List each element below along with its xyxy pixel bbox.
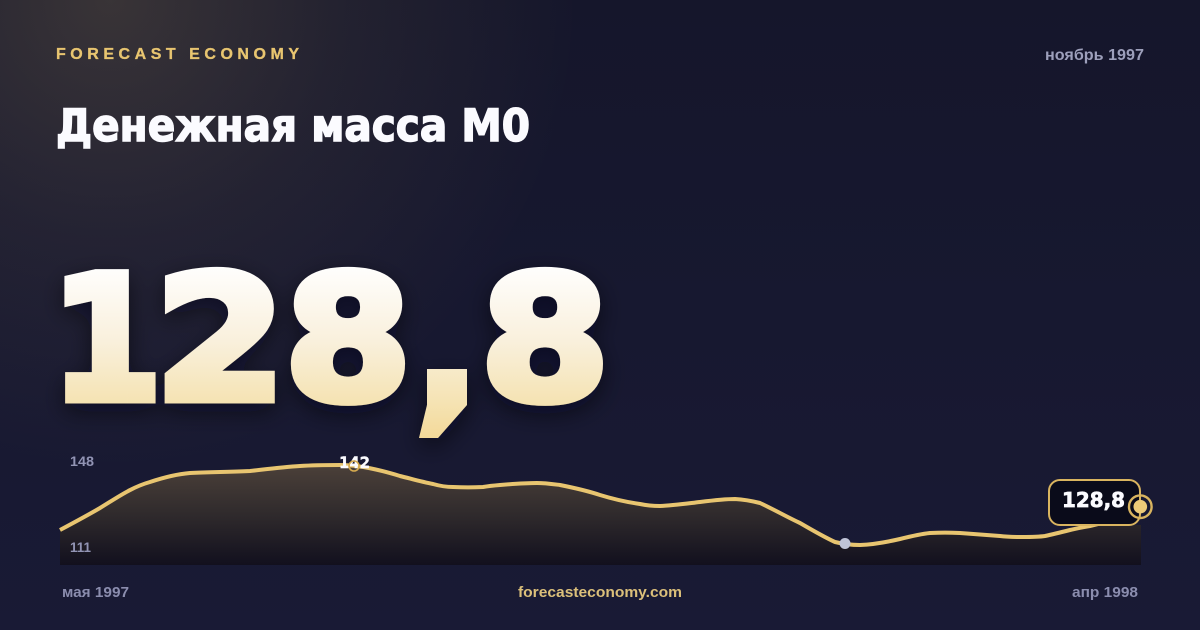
current value marker — [1129, 495, 1152, 518]
line — [60, 465, 1130, 545]
current value callout — [1049, 480, 1140, 525]
brand label: FORECAST ECONOMY — [56, 46, 299, 63]
area fill — [60, 465, 1141, 565]
current value callout: 128,8 — [1062, 488, 1125, 512]
decimal comma: , — [443, 404, 444, 406]
source url: forecasteconomy.com — [518, 584, 682, 601]
sparkline chart — [60, 453, 1152, 565]
end date: апр 1998 — [1072, 584, 1138, 601]
axis max: 148 — [70, 453, 94, 469]
title: Денежная масса М0 — [56, 101, 530, 152]
date label: ноябрь 1997 — [1045, 47, 1144, 64]
low marker — [840, 538, 850, 549]
big value 128,8 — [50, 239, 610, 440]
big value 128,8: 2 — [155, 239, 286, 440]
peak marker — [349, 461, 359, 471]
start date: мая 1997 — [62, 584, 129, 601]
peak label: 142 — [339, 453, 370, 472]
big value 128,8: 8 — [480, 240, 610, 440]
big value 128,8: 1 — [50, 240, 162, 440]
big value 128,8: 8 — [284, 239, 412, 440]
decimal comma — [419, 369, 467, 438]
axis min: 111 — [70, 539, 91, 555]
